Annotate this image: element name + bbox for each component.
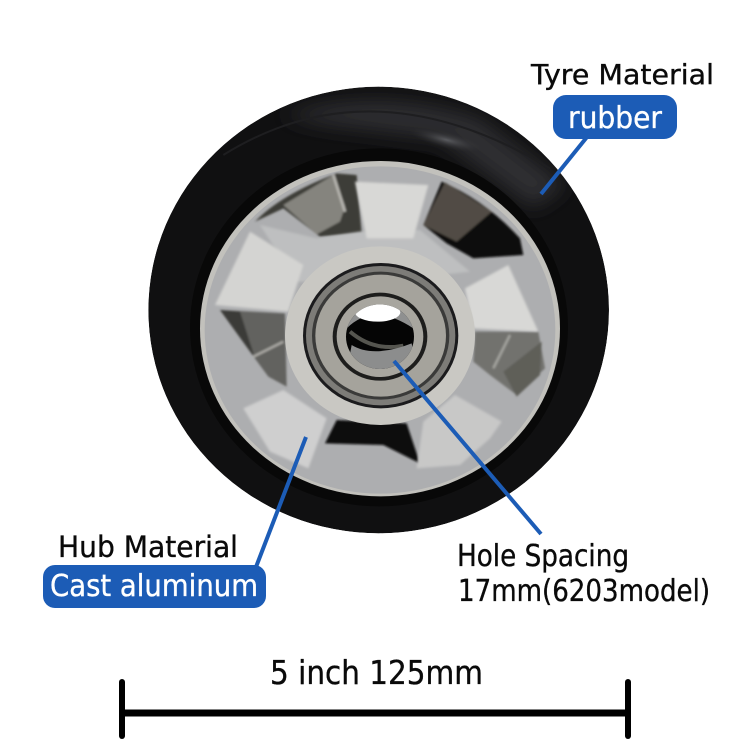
rubber tyre [148, 87, 609, 533]
badge: rubber [553, 95, 677, 139]
label: hole spacing: Hole Spacing [457, 539, 629, 574]
dimension bar [122, 682, 628, 736]
hub web highlight [260, 225, 470, 282]
spoke: right [465, 265, 538, 332]
spoke: upper left [215, 232, 303, 312]
label: hole spacing [457, 539, 710, 609]
badge: rubber: rubber [568, 101, 663, 136]
pocket: top left [255, 173, 362, 237]
spoke: lower right [417, 395, 502, 468]
inner tyre shoulder [190, 148, 568, 506]
spoke: lower left [243, 390, 327, 468]
spoke: top [355, 182, 428, 238]
bearing [303, 263, 458, 408]
dimension label: 5 inch 125mm [270, 653, 483, 692]
pocket: bottom [325, 420, 420, 463]
label: tyre material: Tyre Material [530, 58, 714, 91]
pocket: left [220, 310, 287, 387]
hub collar [285, 246, 475, 425]
label: hole spacing: 17mm(6203model) [458, 574, 710, 609]
leader line: tyre [541, 137, 587, 194]
leader line: hub [256, 437, 306, 567]
aluminium rim [200, 161, 560, 496]
badge: cast aluminum: Cast aluminum [50, 569, 258, 604]
pocket: top right [423, 182, 523, 258]
bearing bore [346, 304, 414, 369]
leader line: bearing hole [394, 361, 541, 534]
hub casting [215, 173, 545, 468]
label: hub material: Hub Material [58, 530, 238, 564]
pocket: right [473, 332, 545, 397]
hub web [205, 166, 555, 494]
wheel photo [148, 87, 609, 533]
